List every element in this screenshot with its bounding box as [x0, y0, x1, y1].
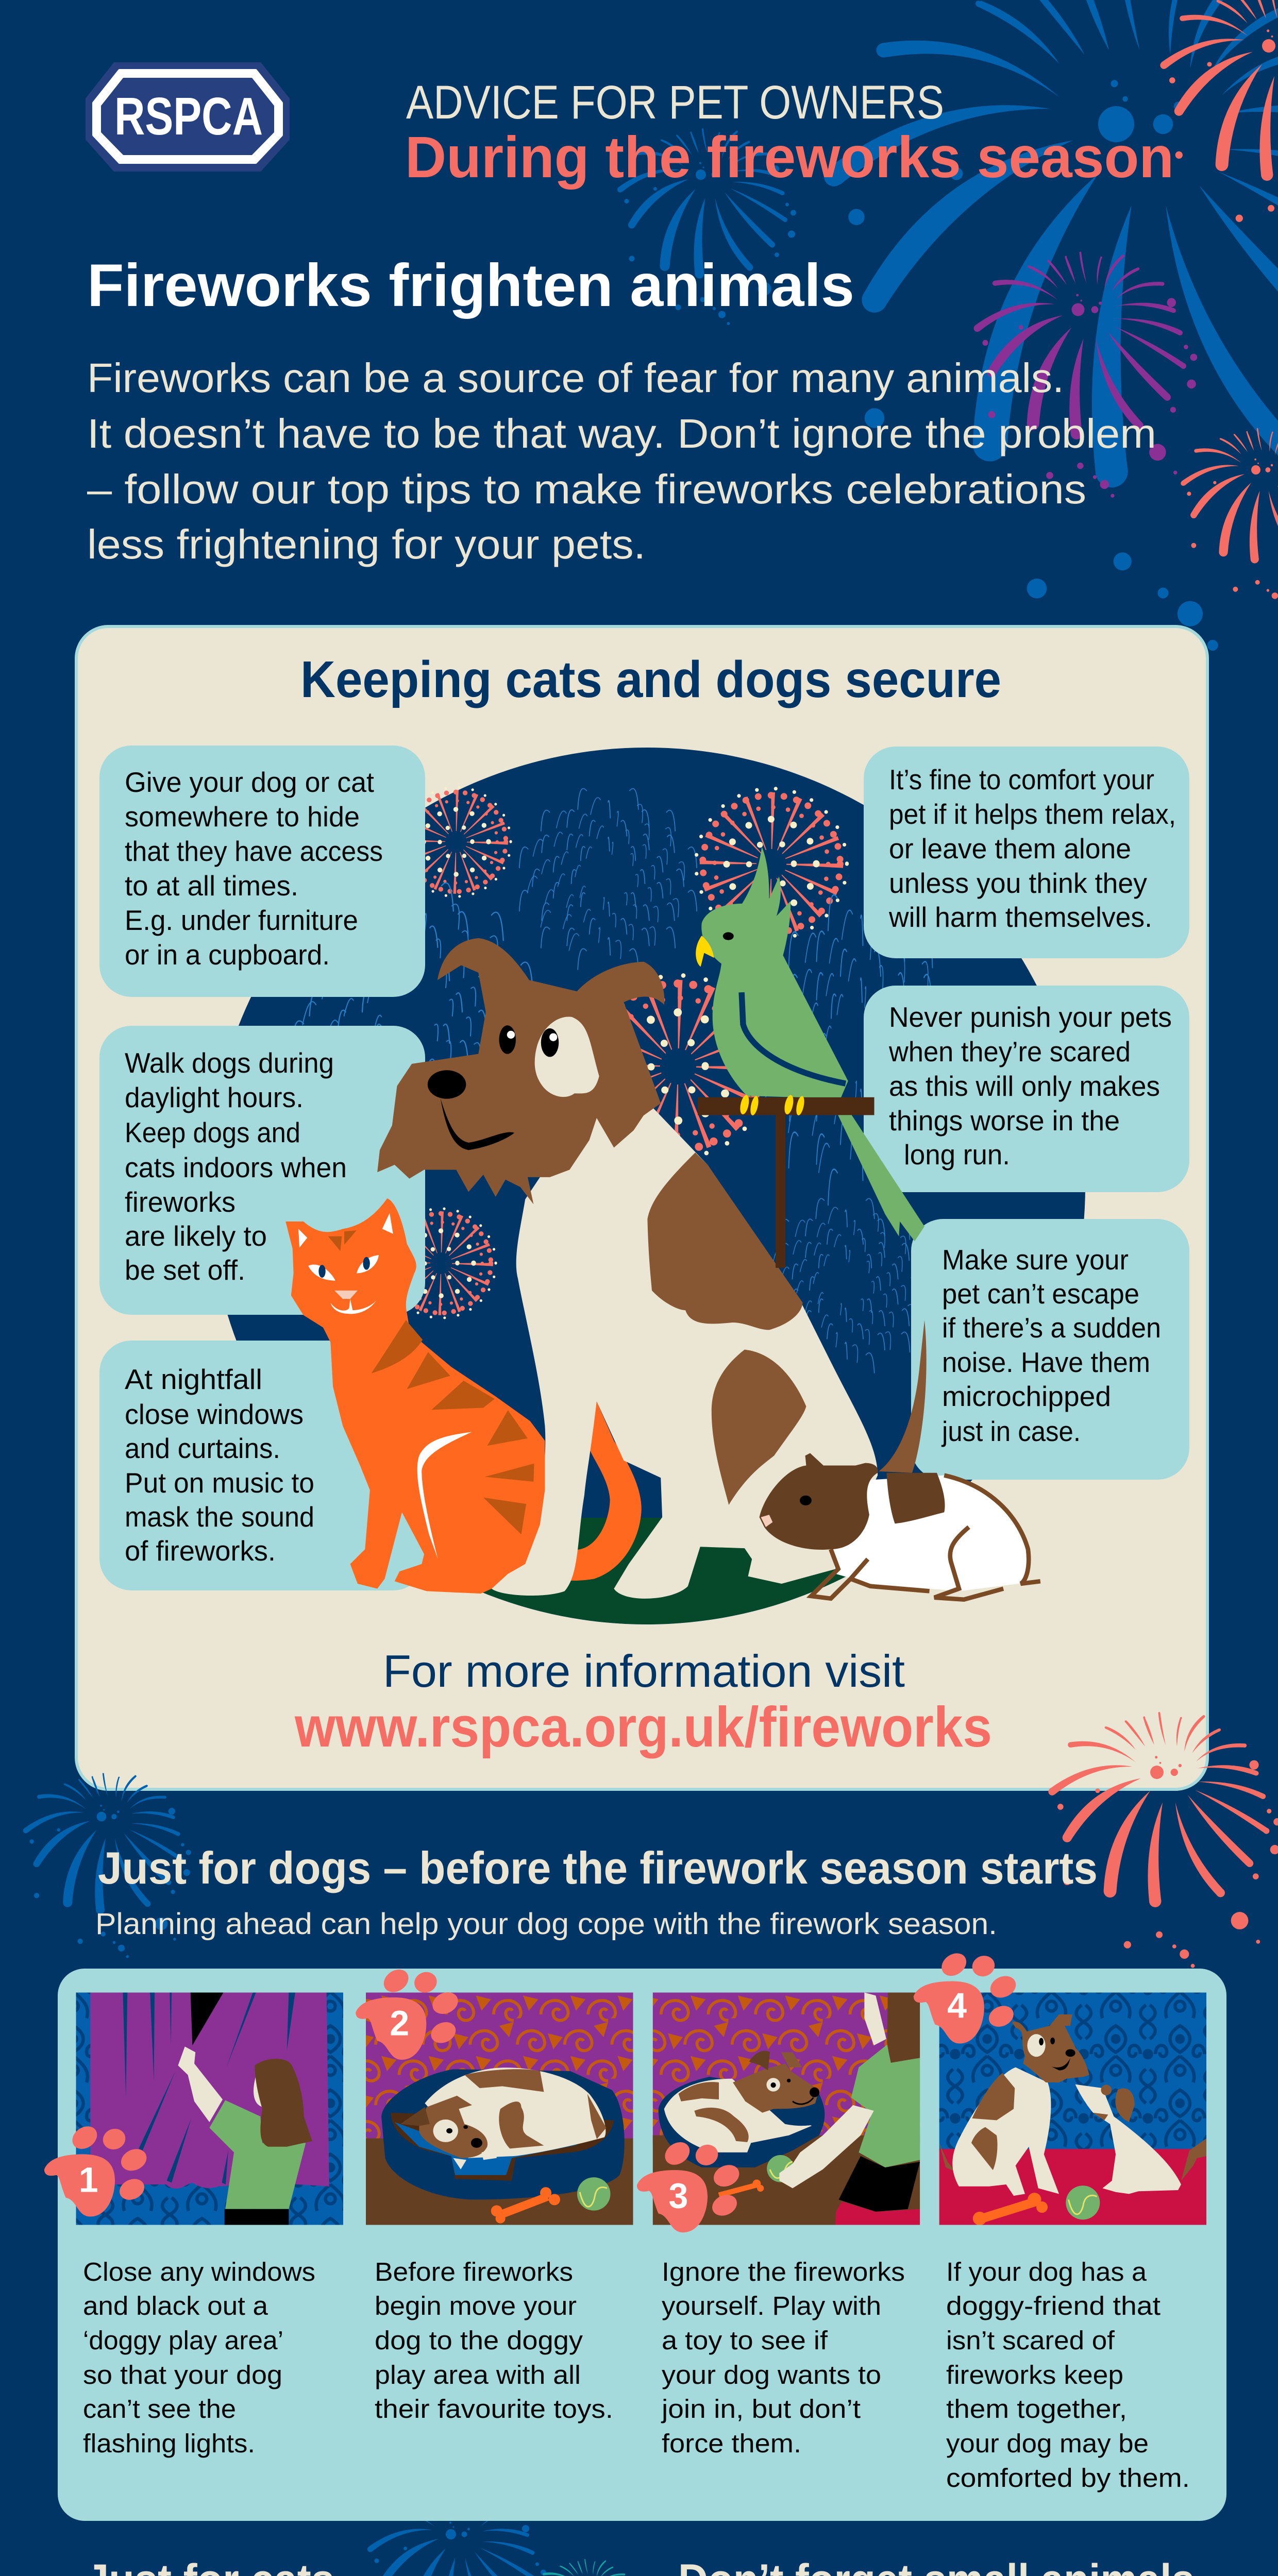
- step 1 text: [83, 2257, 315, 2458]
- step 1 paw: 1: [79, 2161, 98, 2200]
- logo: RSPCA: [86, 62, 290, 172]
- step 2 text: begin move your: [375, 2291, 577, 2320]
- header: during the fireworks season: During the fireworks season: [405, 125, 1174, 190]
- tip: walk dogs during daylight: are likely to: [125, 1220, 267, 1252]
- tip: somewhere to hide: somewhere to hide: [125, 801, 360, 833]
- tip: comfort your pet: [864, 747, 1189, 958]
- illustrations: steps 1 and 2: [44, 1965, 633, 2225]
- step 3 text: yourself. Play with: [662, 2291, 881, 2320]
- tip: walk dogs during daylight: fireworks: [125, 1186, 236, 1218]
- grass: [360, 1518, 933, 1624]
- tip: comfort your pet: pet if it helps them relax,: [889, 798, 1176, 830]
- header: advice for pet owners: ADVICE FOR PET OWNERS: [406, 76, 944, 129]
- night sky circle: [208, 748, 1085, 1624]
- intro paragraph: [87, 355, 1156, 567]
- step 3 paw: [637, 2138, 743, 2232]
- intro paragraph: Fireworks can be a source of fear for many animals.: [87, 355, 1064, 401]
- tip: microchip: Make sure your: [942, 1244, 1129, 1276]
- tip: microchip: microchipped: [942, 1380, 1111, 1412]
- step 4 text: If your dog has a: [946, 2257, 1147, 2286]
- step 3 text: force them.: [662, 2429, 801, 2458]
- tip: at nightfall: of fireworks.: [125, 1535, 276, 1567]
- step 4 text: them together,: [946, 2394, 1127, 2424]
- fireworks: between panels: [23, 1712, 1278, 2576]
- step 4 text: isn’t scared of: [946, 2326, 1115, 2355]
- step 3 paw: 3: [669, 2177, 688, 2216]
- step 2 image: dog in bed: [366, 1992, 633, 2225]
- tip: comfort your pet: or leave them alone: [889, 833, 1131, 865]
- step 3 image: playing with toy: [653, 1992, 920, 2225]
- tip: somewhere to hide: to at all times.: [125, 870, 298, 902]
- tip: walk dogs during daylight: Walk dogs during: [125, 1047, 334, 1079]
- step 2 paw: [356, 1965, 462, 2060]
- step 3 text: your dog wants to: [662, 2360, 881, 2389]
- heading: just for dogs: Just for dogs – before the firework season starts: [98, 1842, 1098, 1893]
- dog tail: [879, 1320, 927, 1473]
- step 1 text: and black out a: [83, 2291, 268, 2320]
- tip: never punish: [864, 986, 1189, 1192]
- tip: at nightfall: and curtains.: [125, 1432, 280, 1464]
- tip: at nightfall: [99, 1341, 425, 1590]
- tip: walk dogs during daylight: cats indoors when: [125, 1151, 347, 1183]
- tip: never punish: Never punish your pets: [889, 1001, 1172, 1033]
- fireworks in the circle: [292, 787, 955, 1373]
- tip: somewhere to hide: Give your dog or cat: [125, 766, 374, 798]
- intro paragraph: less frightening for your pets.: [87, 521, 646, 567]
- tip: microchip: just in case.: [941, 1415, 1081, 1447]
- perch: [698, 1097, 874, 1268]
- illustrations: steps 3 and 4: [637, 1948, 1206, 2232]
- step 2 text: dog to the doggy: [375, 2326, 583, 2355]
- step 3 text: join in, but don’t: [661, 2394, 861, 2424]
- step 2 text: their favourite toys.: [375, 2394, 613, 2424]
- step 2 paw: 2: [390, 2004, 409, 2043]
- step 1 text: can’t see the: [83, 2394, 236, 2424]
- cat: [285, 1198, 545, 1594]
- heading: fireworks frighten animals: Fireworks frighten animals: [87, 251, 854, 319]
- tip: at nightfall: Put on music to: [125, 1467, 314, 1499]
- step 2 text: [375, 2257, 613, 2424]
- panel: just for dogs steps: [44, 1948, 1226, 2521]
- step 4 text: doggy-friend that: [946, 2291, 1161, 2320]
- tip: somewhere to hide: E.g. under furniture: [125, 904, 358, 936]
- tip: microchip: if there’s a sudden: [942, 1312, 1161, 1344]
- step 2 text: play area with all: [375, 2360, 581, 2389]
- step 3 text: a toy to see if: [662, 2326, 828, 2355]
- tip: somewhere to hide: that they have access: [125, 835, 383, 867]
- intro paragraph: It doesn’t have to be that way. Don’t ignore the problem: [87, 411, 1156, 456]
- fireworks: top right background: [617, 0, 1278, 651]
- step 4 text: fireworks keep: [946, 2360, 1123, 2389]
- step 1 text: ‘doggy play area’: [83, 2326, 283, 2355]
- step 3 text: Ignore the fireworks: [662, 2257, 905, 2286]
- tip: walk dogs during daylight: daylight hours.: [125, 1081, 304, 1113]
- step 4 paw: 4: [947, 1986, 967, 2025]
- step 1 text: Close any windows: [83, 2257, 315, 2286]
- link: rspca fireworks: www.rspca.org.uk/fireworks: [294, 1696, 992, 1759]
- step 4 image: dog and friend: [939, 1992, 1206, 2225]
- tip: somewhere to hide: or in a cupboard.: [125, 939, 330, 971]
- tip: comfort your pet: It’s fine to comfort your: [889, 764, 1154, 795]
- tip: walk dogs during daylight: [99, 1026, 425, 1315]
- tip: at nightfall: mask the sound: [125, 1501, 314, 1533]
- tip: comfort your pet: unless you think they: [889, 867, 1147, 899]
- step 4 paw: [914, 1948, 1019, 2043]
- subheading: planning ahead: Planning ahead can help your dog cope with the firework season.: [95, 1907, 997, 1941]
- logo: RSPCA: RSPCA: [114, 87, 263, 146]
- tip: microchip: [911, 1219, 1189, 1480]
- tip: never punish: things worse in the: [889, 1105, 1120, 1137]
- tip: walk dogs during daylight: be set off.: [125, 1254, 245, 1286]
- panel: keeping cats and dogs secure: [76, 626, 1207, 1789]
- text: for more information visit: For more information visit: [383, 1646, 905, 1697]
- tip: at nightfall: At nightfall: [125, 1363, 262, 1395]
- heading: keeping cats and dogs secure: Keeping cats and dogs secure: [300, 651, 1001, 708]
- step 1 paw: [44, 2122, 150, 2216]
- intro paragraph: – follow our top tips to make fireworks celebrations: [87, 466, 1086, 512]
- tip: never punish: when they’re scared: [888, 1036, 1131, 1067]
- tip: walk dogs during daylight: Keep dogs and: [125, 1116, 300, 1148]
- tip: comfort your pet: will harm themselves.: [888, 901, 1152, 933]
- step 1 image: closing curtains: [76, 1992, 343, 2225]
- tip: at nightfall: close windows: [125, 1398, 304, 1430]
- cat tail: [557, 1401, 642, 1581]
- illustration: pets group: [285, 847, 1040, 1600]
- step 4 text: your dog may be: [946, 2429, 1149, 2458]
- tip: microchip: pet can’t escape: [942, 1278, 1139, 1310]
- dog: [377, 938, 878, 1599]
- step 4 text: comforted by them.: [946, 2463, 1190, 2493]
- tip: never punish: as this will only makes: [889, 1070, 1160, 1102]
- step 4 text: [946, 2257, 1190, 2493]
- tip: microchip: noise. Have them: [942, 1346, 1150, 1378]
- step 2 text: Before fireworks: [375, 2257, 573, 2286]
- parrot: [696, 847, 924, 1241]
- guinea pig: [760, 1453, 1040, 1600]
- step 1 text: so that your dog: [83, 2360, 282, 2389]
- step 3 text: [661, 2257, 905, 2458]
- tip: never punish: long run.: [904, 1139, 1010, 1171]
- step 1 text: flashing lights.: [83, 2429, 255, 2458]
- tip: somewhere to hide: [99, 745, 425, 997]
